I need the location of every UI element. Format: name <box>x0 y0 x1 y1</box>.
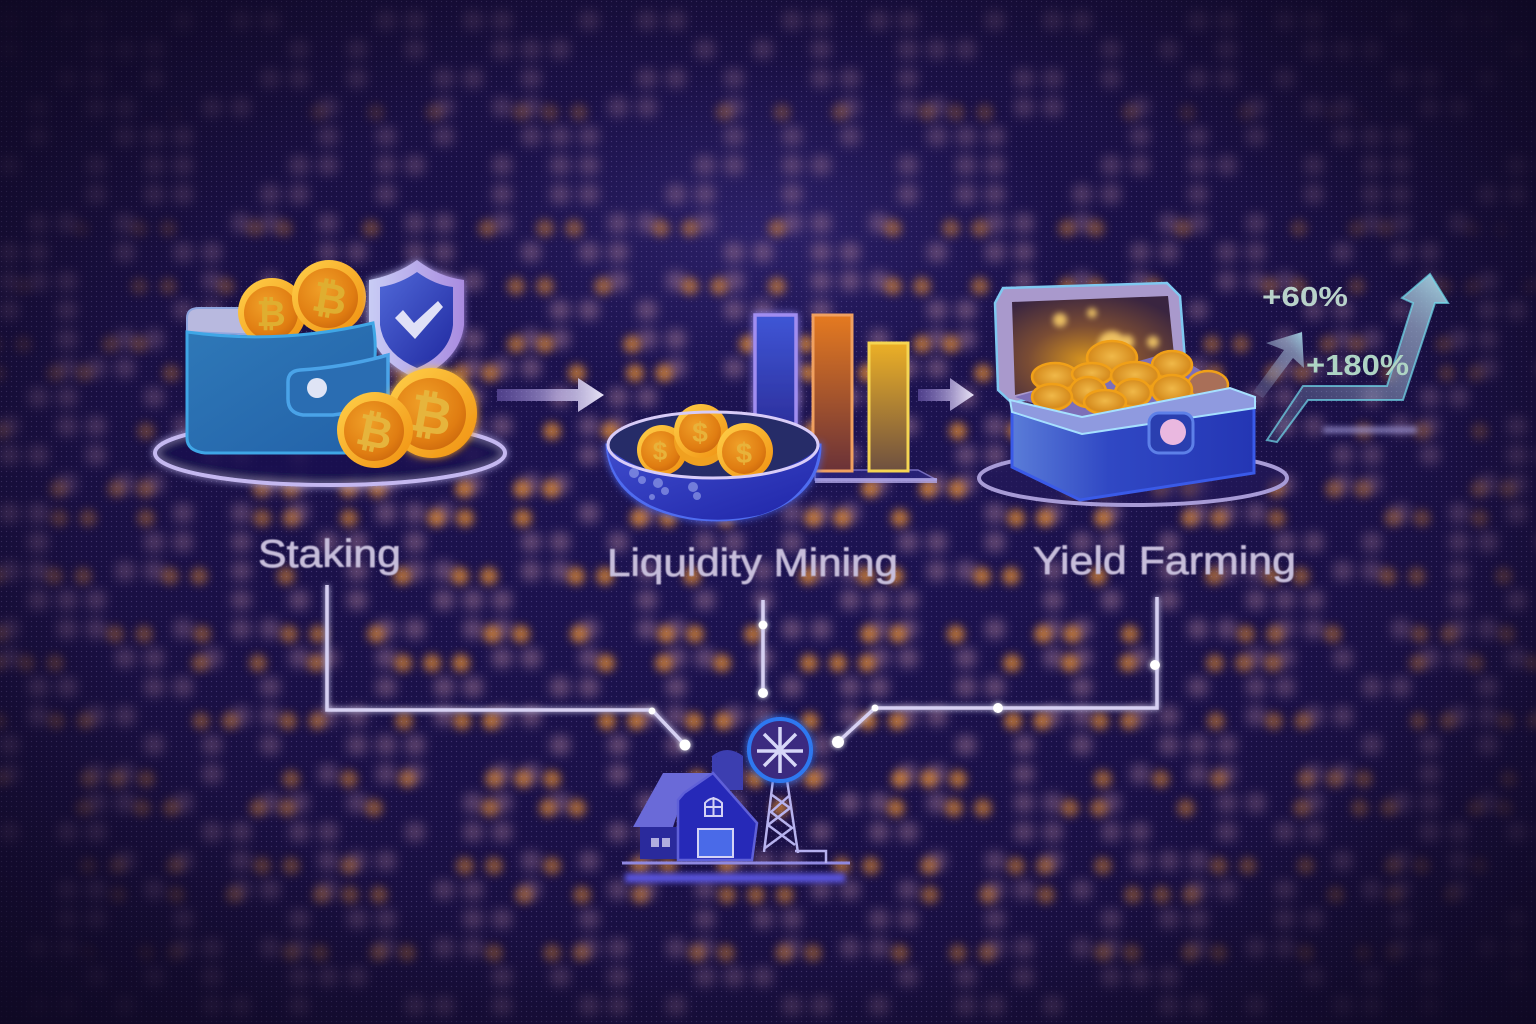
arrow: liquidity to yield <box>918 378 974 411</box>
wallet flap with button <box>288 355 388 415</box>
staking wallet illustration <box>155 260 505 485</box>
short arrow <box>1253 332 1304 398</box>
coin: bowl right <box>717 423 773 479</box>
treasure coins <box>1032 341 1228 414</box>
bar: yellow <box>869 343 908 471</box>
yield chest illustration <box>979 283 1287 505</box>
ground lines <box>622 862 850 864</box>
flat trail line <box>1323 427 1417 433</box>
barn roof <box>633 773 713 827</box>
windmill wheel <box>749 719 811 781</box>
chart base <box>815 470 937 480</box>
bar: orange <box>813 315 852 471</box>
connector: staking to farm <box>327 585 690 750</box>
platform ring: staking <box>155 421 505 485</box>
liquidity bar chart <box>755 315 937 483</box>
windmill tower <box>764 780 798 853</box>
platform ring: yield <box>979 451 1287 505</box>
coin: top right: ₿ <box>309 271 351 326</box>
label: Liquidity Mining: Liquidity Mining <box>607 542 898 585</box>
coin: bowl left: $ <box>653 436 668 466</box>
coin: bowl centre <box>674 404 728 466</box>
chest body <box>1012 402 1254 500</box>
coin: front large: ₿ <box>405 383 457 449</box>
chest interior glow <box>1012 296 1174 395</box>
connector: liquidity to farm <box>758 600 768 698</box>
farm illustration <box>622 719 850 878</box>
coin: front small <box>337 392 413 468</box>
shield with check <box>369 260 464 379</box>
wallet back rim <box>187 308 289 336</box>
silo <box>712 750 743 790</box>
label: +180%: +180% <box>1306 350 1409 382</box>
coin: top left: ₿ <box>256 294 286 335</box>
chest lid <box>995 283 1185 403</box>
barn front <box>678 773 757 860</box>
barn window <box>705 797 722 816</box>
barn door <box>698 829 733 857</box>
coin: bowl left <box>637 425 687 475</box>
coin: top right <box>292 260 366 334</box>
wallet body <box>187 323 388 453</box>
label: Staking: Staking <box>258 533 401 576</box>
bar: blue <box>755 315 796 475</box>
coin: bowl centre: $ <box>692 417 708 448</box>
label: +60%: +60% <box>1262 281 1348 312</box>
label: Yield Farming: Yield Farming <box>1033 540 1296 583</box>
liquidity bowl with coins <box>607 404 820 520</box>
coin: top left <box>238 278 306 346</box>
coin: front large <box>387 368 477 458</box>
coin: front small: ₿ <box>352 404 398 461</box>
back rim of chest <box>1015 352 1230 420</box>
arrow: staking to liquidity <box>497 378 604 412</box>
chest clasp <box>1149 413 1193 453</box>
coin: bowl right: $ <box>736 438 752 470</box>
long arrow <box>1267 274 1448 442</box>
bowl front and rim <box>607 447 820 520</box>
growth arrows <box>1253 274 1448 442</box>
connector: yield to farm <box>832 597 1160 748</box>
bowl flower decoration <box>629 468 701 500</box>
barn wall <box>640 827 678 859</box>
chest rim <box>1010 388 1255 434</box>
